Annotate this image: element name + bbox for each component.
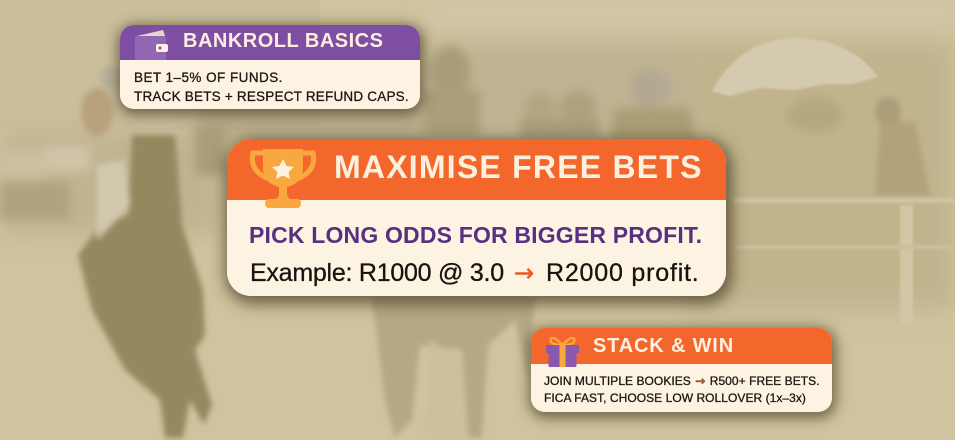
icon: gift xyxy=(546,337,579,367)
bankroll line 2: TRACK BETS + RESPECT REFUND CAPS. xyxy=(134,89,409,104)
stack line 1: JOIN MULTIPLE BOOKIES → R500+ FREE BETS. xyxy=(544,374,820,388)
bankroll heading: BANKROLL BASICS xyxy=(183,30,383,52)
maximise example line: Example: R1000 @ 3.0 xyxy=(250,259,504,287)
bankroll header band xyxy=(120,25,420,60)
maximise arrow: → xyxy=(514,259,534,287)
icon: trophy xyxy=(250,149,316,208)
umbrella and fence xyxy=(712,38,955,325)
bankroll line 1: BET 1–5% OF FUNDS. xyxy=(134,70,283,85)
stack line 2: FICA FAST, CHOOSE LOW ROLLOVER (1x–3x) xyxy=(544,391,806,405)
stack heading: STACK & WIN xyxy=(593,335,734,357)
panel: bankroll basics xyxy=(120,25,420,109)
panel: maximise free bets xyxy=(227,139,726,296)
crowd and riders xyxy=(0,46,843,220)
maximise profit text: R2000 profit. xyxy=(546,259,700,287)
maximise purple line: PICK LONG ODDS FOR BIGGER PROFIT. xyxy=(249,222,702,248)
stack header band xyxy=(531,328,832,364)
maximise header band xyxy=(227,139,726,200)
panel: stack and win xyxy=(531,328,832,412)
icon: wallet xyxy=(135,30,168,60)
maximise heading: MAXIMISE FREE BETS xyxy=(334,149,703,185)
horses and jockeys xyxy=(78,66,930,438)
